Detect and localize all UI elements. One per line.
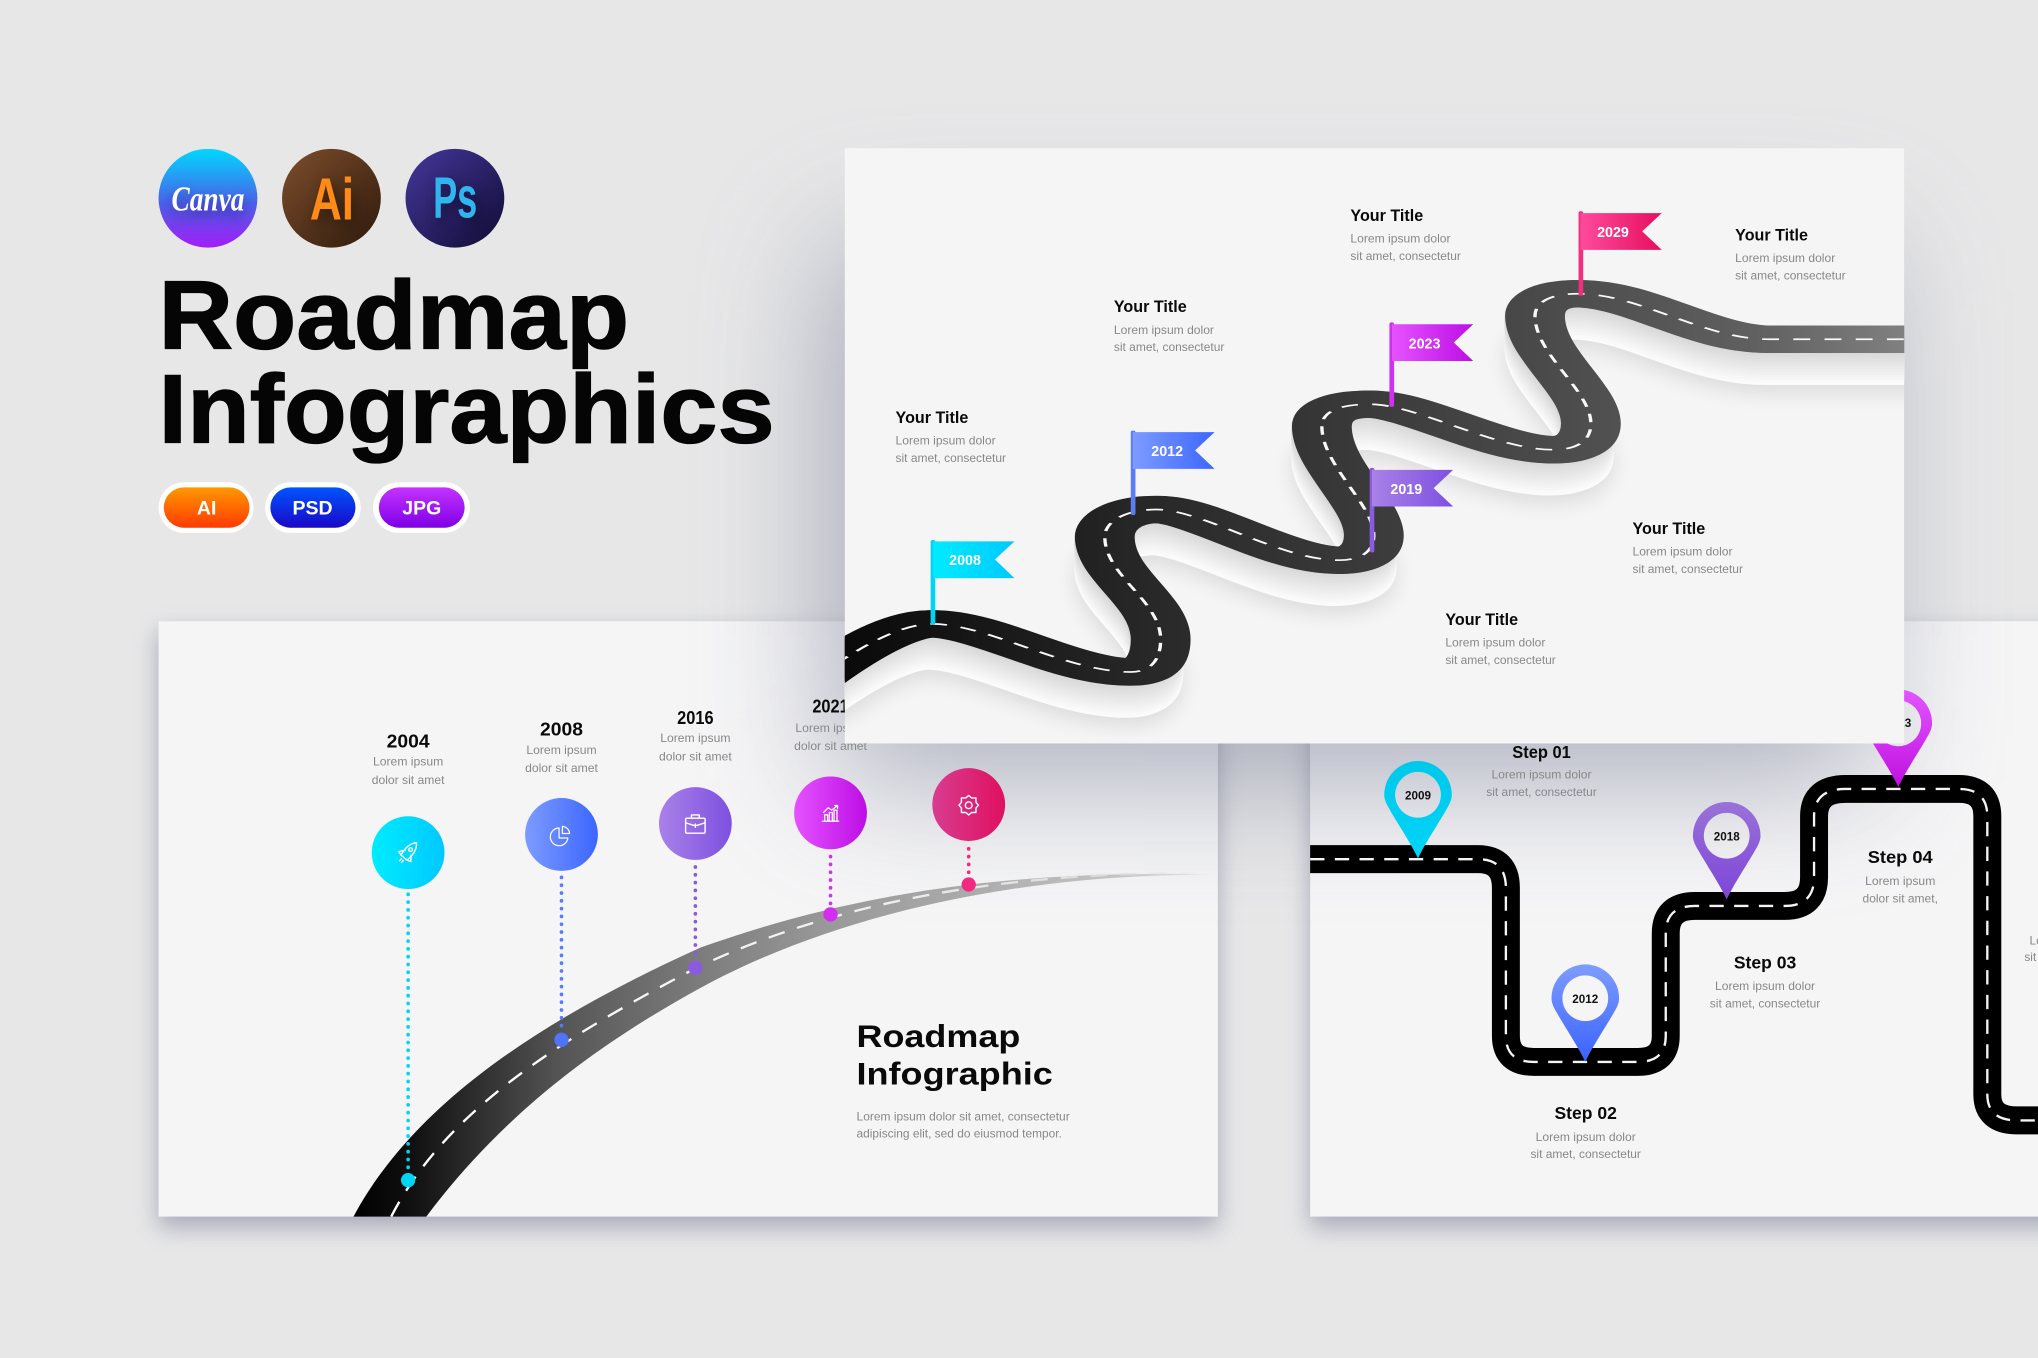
shadow of top panel on page background [832, 247, 1870, 780]
milestone 2016 [659, 708, 732, 975]
milestone 2016: Lorem ipsum [660, 731, 731, 745]
text: title 2 [1114, 298, 1224, 354]
flag 2029: 2029 [1597, 225, 1629, 241]
road: stepped [1310, 789, 2038, 1120]
text: title 5: Your Title [1632, 520, 1705, 538]
text: title 5: Lorem ipsum dolor [1632, 545, 1733, 559]
text: title 1: sit amet, consectetur [896, 451, 1006, 465]
badge: PSD [265, 482, 361, 533]
icon: Adobe Photoshop: Ps [433, 166, 477, 231]
badge: JPG: JPG [402, 498, 441, 520]
milestone 2016: dolor sit amet [659, 749, 732, 763]
milestone 2004: 2004 [387, 731, 430, 751]
heading: Roadmap Infographic [857, 1018, 1053, 1092]
panel: winding 3D road with flags [815, 148, 1939, 743]
flag 2012 [1131, 431, 1215, 515]
icon: Adobe Photoshop [406, 149, 504, 248]
pin 2012: 2012 [1572, 993, 1599, 1006]
text: title 4 [1735, 226, 1846, 282]
milestone 2008 [525, 720, 599, 1047]
title: Roadmap [159, 260, 629, 369]
milestone 5 [932, 768, 1005, 892]
milestone 2008: dolor sit amet [525, 761, 599, 775]
milestone 2008: Lorem ipsum [526, 743, 597, 757]
badge: PSD: PSD [293, 498, 333, 520]
badge: AI [159, 482, 253, 533]
step 04 text: Lorem ipsum [1865, 874, 1935, 888]
step 03 text: Lorem ipsum dolor [1715, 979, 1815, 993]
text: title 1 [896, 409, 1006, 465]
flag 2012: 2012 [1151, 444, 1183, 460]
text block: intro: adipiscing elit, sed do eiusmod tempor. [857, 1126, 1062, 1140]
milestone 2004: Lorem ipsum [373, 755, 443, 769]
flag 2023: 2023 [1409, 336, 1440, 352]
step 03 text: Step 03 [1734, 952, 1796, 972]
milestone 2021: dolor sit amet [794, 739, 868, 753]
text: title 4: Lorem ipsum dolor [1735, 251, 1835, 265]
title: Infographics [159, 355, 775, 464]
flag 2029 [1579, 211, 1662, 296]
text block: intro: Lorem ipsum dolor sit amet, consectetur [857, 1109, 1070, 1123]
text: title 2: sit amet, consectetur [1114, 340, 1224, 354]
pin 2012 [1552, 964, 1619, 1062]
text: title 3: Lorem ipsum dolor [1350, 231, 1451, 245]
icon: Adobe Illustrator [282, 149, 381, 248]
text: title 2: Lorem ipsum dolor [1114, 323, 1214, 337]
text: title 3: Your Title [1350, 207, 1423, 225]
text: title 3 [1350, 207, 1461, 263]
heading: Roadmap Infographic: Roadmap [857, 1018, 1020, 1054]
text: title 3: sit amet, consectetur [1350, 249, 1461, 263]
step 04 text [1863, 847, 1938, 906]
milestone 2016: 2016 [677, 708, 714, 728]
road: winding 3D [815, 294, 1939, 716]
flag 2023 [1389, 322, 1473, 407]
milestone 2008: 2008 [540, 720, 583, 740]
text: title 1: Your Title [896, 409, 968, 427]
text: title 6: Lorem ipsum dolor [1445, 636, 1545, 650]
badge: AI: AI [197, 498, 216, 520]
step 02 text: Lorem ipsum dolor [1536, 1130, 1636, 1144]
text: title 5 [1632, 520, 1743, 576]
step 03 text [1710, 952, 1820, 1010]
step 04 text: Step 04 [1868, 847, 1933, 867]
flag 2019 [1370, 468, 1453, 552]
road: curved perspective [354, 873, 1217, 1217]
pin 2018 [1693, 802, 1761, 899]
text: title 4: sit amet, consectetur [1735, 268, 1846, 282]
heading: Roadmap Infographic: Infographic [857, 1056, 1053, 1092]
pin 2009: 2009 [1405, 789, 1432, 802]
format badges [159, 482, 470, 533]
step 02 text: sit amet, consectetur [1530, 1147, 1641, 1161]
text: title 6: Your Title [1445, 611, 1518, 629]
milestone 2021 [794, 696, 868, 922]
text: title 1: Lorem ipsum dolor [896, 434, 996, 448]
badge: JPG [373, 482, 470, 533]
pin 2023 [1864, 690, 1932, 787]
title [159, 260, 775, 464]
milestone 2021: 2021 [812, 696, 849, 716]
step 01 text [1486, 742, 1597, 799]
text: title 2: Your Title [1114, 298, 1187, 316]
step 03 text: sit amet, consectetur [1710, 996, 1820, 1010]
text: title 6 [1445, 611, 1556, 667]
flag 2019: 2019 [1390, 482, 1422, 498]
flag 2008: 2008 [949, 553, 981, 569]
step 01 text: Lorem ipsum dolor [1491, 768, 1592, 782]
step 02 text: Step 02 [1554, 1103, 1617, 1123]
step 05 text [2024, 933, 2038, 964]
pin 2009 [1384, 761, 1452, 858]
pin 2023: 2023 [1885, 717, 1912, 730]
icon: Adobe Illustrator: Ai [310, 165, 354, 232]
flag 2008 [931, 540, 1014, 625]
text: title 4: Your Title [1735, 226, 1808, 244]
step 04 text: dolor sit amet, [1863, 892, 1938, 906]
text: title 6: sit amet, consectetur [1445, 653, 1556, 667]
icon: Canva [159, 149, 257, 248]
panel: curved road timeline [146, 618, 1231, 1240]
step 01 text: sit amet, consectetur [1486, 785, 1597, 799]
milestone 2021: Lorem ipsum [795, 721, 866, 735]
text: title 5: sit amet, consectetur [1632, 562, 1743, 576]
icon: Canva: Canva [172, 180, 244, 219]
text block: intro [857, 1109, 1070, 1140]
milestone 2004: dolor sit amet [372, 773, 445, 787]
step 02 text [1530, 1103, 1641, 1161]
logo icons row [159, 149, 504, 248]
pin 2018: 2018 [1714, 830, 1740, 843]
panel: stepped road with pins [1297, 618, 2038, 1240]
milestone 2004 [372, 731, 445, 1187]
step 01 text: Step 01 [1512, 742, 1571, 762]
